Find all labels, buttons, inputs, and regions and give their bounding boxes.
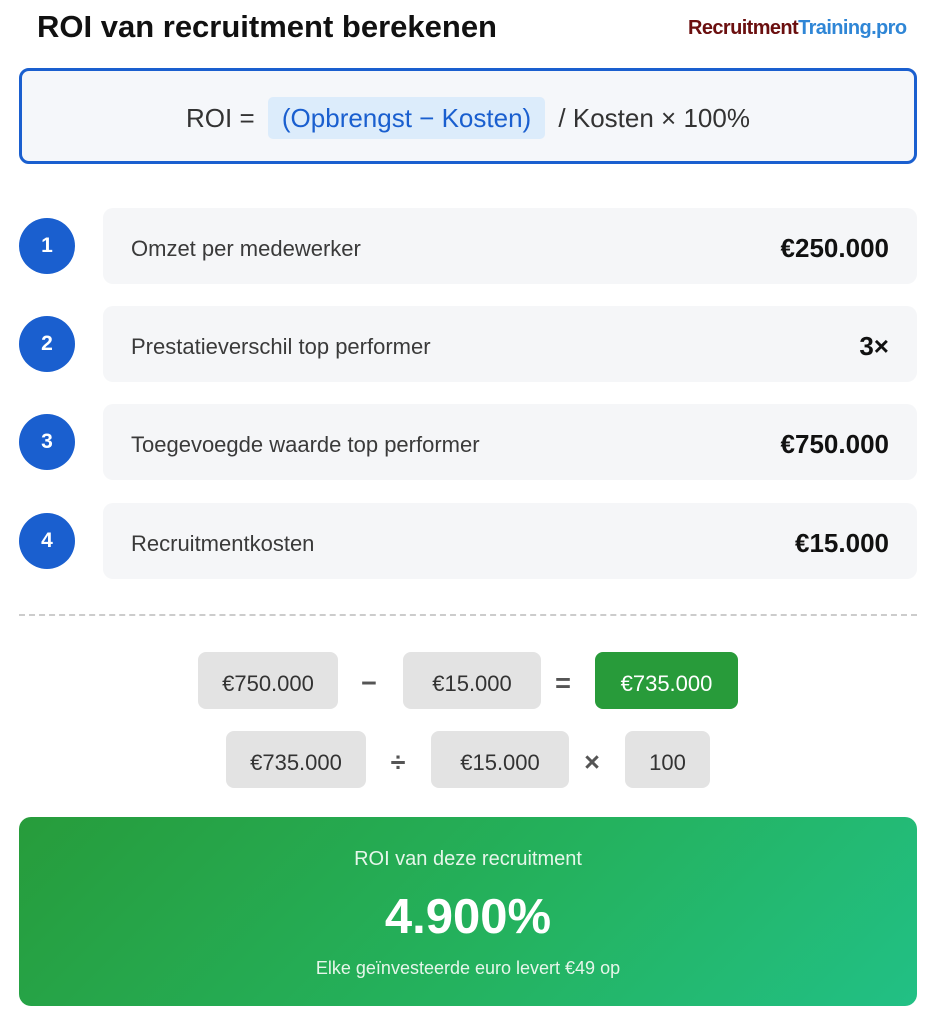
step 2: [19, 306, 917, 382]
icon: number 4: 4: [41, 529, 53, 552]
formula text: (Opbrengst − Kosten): [282, 103, 531, 133]
result value: 4.900%: [385, 890, 551, 944]
calculation row 2: €15.000: [460, 750, 540, 775]
icon: number 3: 3: [41, 430, 53, 453]
card 4: Recruitmentkosten: [131, 531, 314, 556]
logo: RecruitmentTraining.pro: [688, 17, 906, 39]
step 1: [19, 208, 917, 284]
card 3: [103, 404, 917, 480]
result note: Elke geïnvesteerde euro levert €49 op: [316, 958, 620, 978]
card 2: Prestatieverschil top performer: [131, 334, 431, 359]
step 3: [19, 404, 917, 480]
calculation row 1: €15.000: [432, 671, 512, 696]
icon: number 1: 1: [41, 234, 53, 257]
calculation row 1: [198, 652, 738, 709]
calculation row 2: 100: [649, 750, 686, 775]
card 4: €15.000: [795, 528, 889, 558]
card 2: [103, 306, 917, 382]
result box: [595, 652, 738, 709]
calculation row 1: −: [361, 668, 377, 698]
card 4: [103, 503, 917, 579]
calculation row 2: ÷: [391, 747, 405, 777]
card 1: €250.000: [781, 233, 889, 263]
title: ROI van recruitment berekenen: [37, 9, 497, 44]
calculation row 1: €750.000: [222, 671, 314, 696]
icon: number 4: [19, 513, 75, 569]
result box: €735.000: [621, 671, 712, 696]
card 1: Omzet per medewerker: [131, 236, 361, 261]
calculation row 2: €735.000: [250, 750, 342, 775]
step 4: [19, 503, 917, 579]
calculation row 2: [226, 731, 710, 788]
calculation row 1: =: [555, 668, 571, 698]
formula box: [19, 68, 917, 164]
card 3: Toegevoegde waarde top performer: [131, 432, 480, 457]
icon: number 2: [19, 316, 75, 372]
card 1: [103, 208, 917, 284]
formula text: ROI = / Kosten × 100%: [186, 103, 750, 133]
icon: number 1: [19, 218, 75, 274]
card 2: 3×: [859, 331, 889, 361]
card 3: €750.000: [781, 429, 889, 459]
result label: ROI van deze recruitment: [354, 848, 582, 870]
icon: number 3: [19, 414, 75, 470]
icon: number 2: 2: [41, 332, 53, 355]
calculation row 2: ×: [584, 747, 600, 777]
result panel: [19, 817, 917, 1006]
